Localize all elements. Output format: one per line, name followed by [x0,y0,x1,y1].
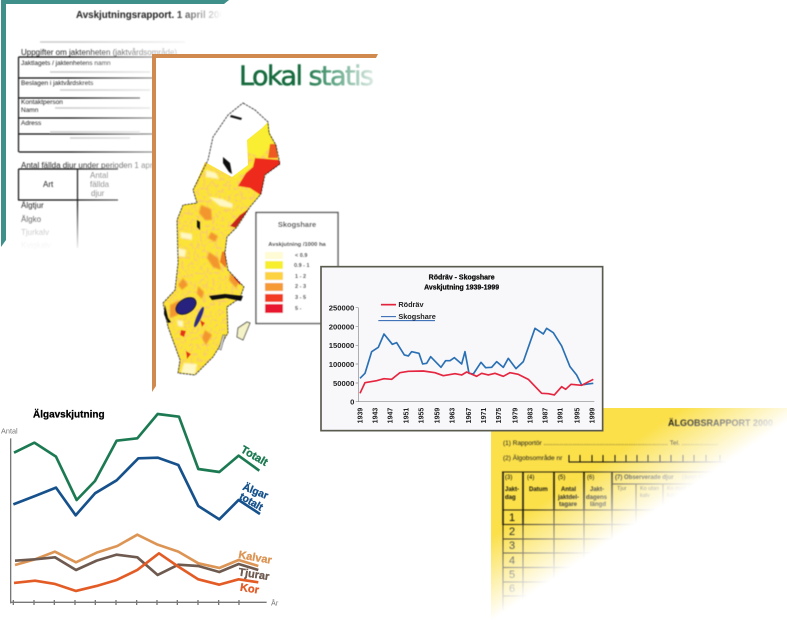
legend title: Skogshare [278,220,316,229]
observation table: 6 [509,583,515,595]
chart title: Avskjutning 1939-1999 [424,284,499,291]
series: kalvar [15,535,273,568]
form fields table: Adress [21,120,42,127]
killed animals table: Älgtjur [21,201,44,210]
observation table: 1 [509,512,515,524]
teal frame [0,0,229,247]
map outline [163,103,280,375]
map legend: 3 - 5 [295,295,306,301]
map legend: 0.9 - 1 [294,263,310,269]
map title: Lokal statis [239,61,374,92]
observation table: (5) [558,475,565,481]
red area [238,158,282,196]
series: totalt [14,414,270,500]
form fields [503,440,740,462]
form title: Avskjutningsrapport. 1 april 2000 [76,10,231,21]
report title: ÄLGOBSRAPPORT 2000 [668,418,773,428]
killed animals table: fällda [90,180,110,189]
axes [1,426,279,607]
x axis labels: 1963 [449,408,456,423]
form fields table: Kontaktperson [21,99,63,106]
observation table [502,472,770,610]
x axis labels: 1951 [403,408,410,423]
observation table: 4 [509,555,515,567]
x axis labels [358,408,596,423]
series: kor: Kor [239,582,260,597]
map of Sweden [160,103,285,380]
map legend: 2 - 3 [295,284,306,290]
panel: moose observation report [485,404,787,620]
form fields table: Jaktlagets / jaktenhetens namn [21,60,111,67]
map legend: 1 - 2 [295,274,306,280]
yellow form sheet [491,408,787,620]
form fields: (2) Älgobsområde nr [503,454,563,462]
chart title [424,274,499,291]
y axis [329,303,594,407]
series: rödräv [360,371,593,395]
yellow north [232,122,272,180]
y axis: 200000 [329,322,354,331]
observation table: dag [505,495,516,501]
series: älgar totalt: Älgar [241,480,270,502]
x axis labels: 1983 [528,408,535,423]
chart title: Rödräv - Skogshare [429,274,495,281]
killed animals table: djur [91,189,105,198]
x axis labels: 1955 [418,408,425,423]
axes: Antal [1,426,18,435]
fade overlay [485,404,787,620]
observation table: Jakt- [505,487,519,493]
orange blobs [170,205,240,345]
killed animals table: Tjurkalv [21,228,49,237]
map legend: 5 - [295,306,302,312]
panel: moose harvest chart [0,399,283,619]
x axis labels: 1947 [388,408,395,423]
observation table: (4) [527,475,534,481]
x axis labels: 1959 [434,408,441,423]
observation table: Antal [561,487,576,493]
form fields table [18,42,185,152]
x axis labels: 1975 [496,408,503,423]
islands [219,322,250,350]
x axis labels: 1987 [543,408,550,423]
x axis labels: 1939 [358,408,365,423]
map legend: Avskjutning /1000 ha [268,242,327,248]
map legend [256,212,338,324]
observation table: Datum [529,487,548,493]
y axis: 250000 [329,303,354,312]
y axis: 100000 [329,360,354,369]
axes: År [271,598,279,607]
lakes [164,115,243,328]
observation table: 5 [509,569,515,581]
killed animals table: Kvigkalv [21,241,51,250]
observation table: (6) [587,475,594,481]
observation table: Ko utan [640,486,659,492]
x axis labels: 1943 [373,408,380,423]
y axis: 150000 [329,341,354,350]
observation table: Jakt- [590,487,604,493]
chart legend [378,300,436,321]
form fields table: Namn [21,107,39,114]
y axis: 50000 [333,379,354,388]
killed animals table: Art [43,180,54,189]
observation table: tagare [559,502,578,508]
panel: fox and hare line chart [321,267,603,431]
y axis: 0 [350,398,354,407]
observation table: 2 [509,526,515,538]
chart legend: Rödräv [398,300,424,309]
series: kor [14,553,260,597]
x axis labels: 1967 [466,408,473,423]
x axis labels: 1979 [513,408,520,423]
x axis labels: 1991 [558,408,565,423]
orange frame [152,54,378,392]
killed animals table: Älgko [21,215,42,224]
series: älgar totalt: totalt [237,491,265,514]
killed animals table [18,161,156,250]
series: tjurar [15,555,271,583]
chart legend: Skogshare [398,312,436,321]
x axis labels: 1995 [574,408,581,423]
observation table: Tjur [617,486,627,492]
series: tjurar: Tjurar [238,566,271,583]
panel: local statistics map [152,54,380,393]
observation table: (7) Observerade djur [615,475,674,481]
observation table: Ko med [667,486,686,492]
panel: hunting report form [0,0,247,255]
observation table: kalv [640,493,650,499]
observation table: (3) [505,475,512,481]
x axis labels: 1999 [589,408,596,423]
moose chart title: Älgavskjutning [33,407,105,420]
observation table: kalv [667,493,677,499]
observation table: jaktdel- [557,495,579,501]
form fields table: Uppgifter om jaktenheten (jaktvårdsområde) [21,48,177,57]
form fields: (1) Rapportör ..................................................................... Tel. .................... [503,440,718,447]
observation table: 3 [509,540,515,552]
observation table: längd [590,502,606,508]
pale patches [177,170,233,375]
series: skogshare [360,328,593,385]
observation table: dagens [586,495,608,501]
map legend: < 0.9 [295,253,307,259]
series: älgar totalt [13,458,270,519]
killed animals table: Antal fällda djur under perioden 1 april [21,161,156,170]
killed animals table: Antal [90,171,108,180]
series: totalt: Totalt [238,444,270,469]
form fields table: Beslagen i jaktvårdskrets [21,79,94,87]
x axis labels: 1971 [481,408,488,423]
observation table: (även hundar) [682,475,719,481]
series: kalvar: Kalvar [237,549,273,567]
